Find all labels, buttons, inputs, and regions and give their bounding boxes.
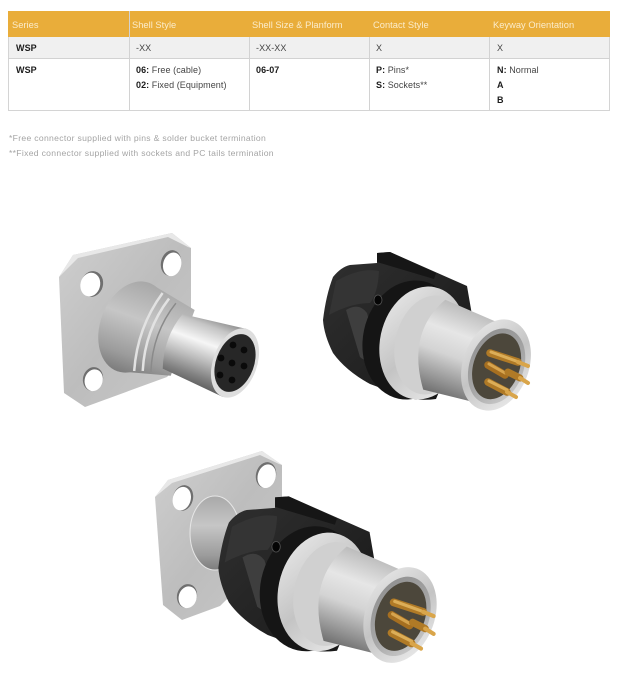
pattern: keyway: X bbox=[497, 43, 503, 53]
pattern: shell style: -XX bbox=[136, 43, 151, 53]
value: keyway options: B bbox=[497, 95, 504, 105]
value: shell style options bbox=[136, 65, 227, 90]
value: contact style options: P: Pins* bbox=[376, 65, 409, 75]
header: Contact Style: Contact Style bbox=[373, 20, 429, 30]
plug assembly bbox=[218, 496, 449, 674]
header: Shell Style: Shell Style bbox=[132, 20, 176, 30]
table header band bbox=[8, 11, 610, 37]
specification table bbox=[8, 11, 610, 111]
value: contact style options: S: Sockets** bbox=[376, 80, 427, 90]
rear body and barrel bbox=[86, 272, 271, 416]
footnote: fixed connector: **Fixed connector supplied with sockets and PC tails termination bbox=[9, 148, 274, 158]
value: contact style options bbox=[376, 65, 428, 90]
value: shell size: 06-07 bbox=[256, 65, 279, 75]
header: Shell Size & Planform: Shell Size & Planform bbox=[252, 20, 343, 30]
mounting holes bbox=[170, 483, 196, 513]
value: keyway options: N: Normal bbox=[497, 65, 539, 75]
pattern: shell size: -XX-XX bbox=[256, 43, 286, 53]
header: Keyway Orientation: Keyway Orientation bbox=[493, 20, 574, 30]
value: keyway options: A bbox=[497, 80, 504, 90]
connector: free plug with pins bbox=[323, 252, 543, 421]
contact sockets bbox=[217, 342, 247, 383]
mounting holes bbox=[78, 269, 106, 299]
column dividers bbox=[129, 11, 130, 110]
table frame bbox=[8, 37, 610, 111]
insulator bbox=[207, 328, 263, 398]
connector: mated pair on flange bbox=[155, 451, 449, 674]
mounting plate bbox=[155, 451, 282, 620]
shaded pattern row bbox=[8, 37, 610, 59]
footnote: free connector: *Free connector supplied with pins & solder bucket termination bbox=[9, 133, 266, 143]
pattern: contact style: X bbox=[376, 43, 382, 53]
rear body bbox=[190, 496, 240, 570]
value: keyway options bbox=[497, 65, 539, 105]
row divider bbox=[8, 58, 610, 59]
rear dome bbox=[86, 272, 180, 382]
barrel face bbox=[202, 322, 268, 404]
collar grooves bbox=[129, 291, 170, 374]
value: series: WSP bbox=[16, 65, 37, 75]
collar bbox=[117, 283, 198, 389]
value: shell style options: 02: Fixed (Equipment) bbox=[136, 80, 227, 90]
front barrel bbox=[156, 305, 247, 397]
pattern: series: WSP bbox=[16, 43, 37, 53]
mounting plate bbox=[59, 233, 191, 407]
connector: fixed flange receptacle with sockets bbox=[59, 233, 271, 416]
value: shell style options: 06: Free (cable) bbox=[136, 65, 201, 75]
header: Series: Series bbox=[12, 20, 39, 30]
